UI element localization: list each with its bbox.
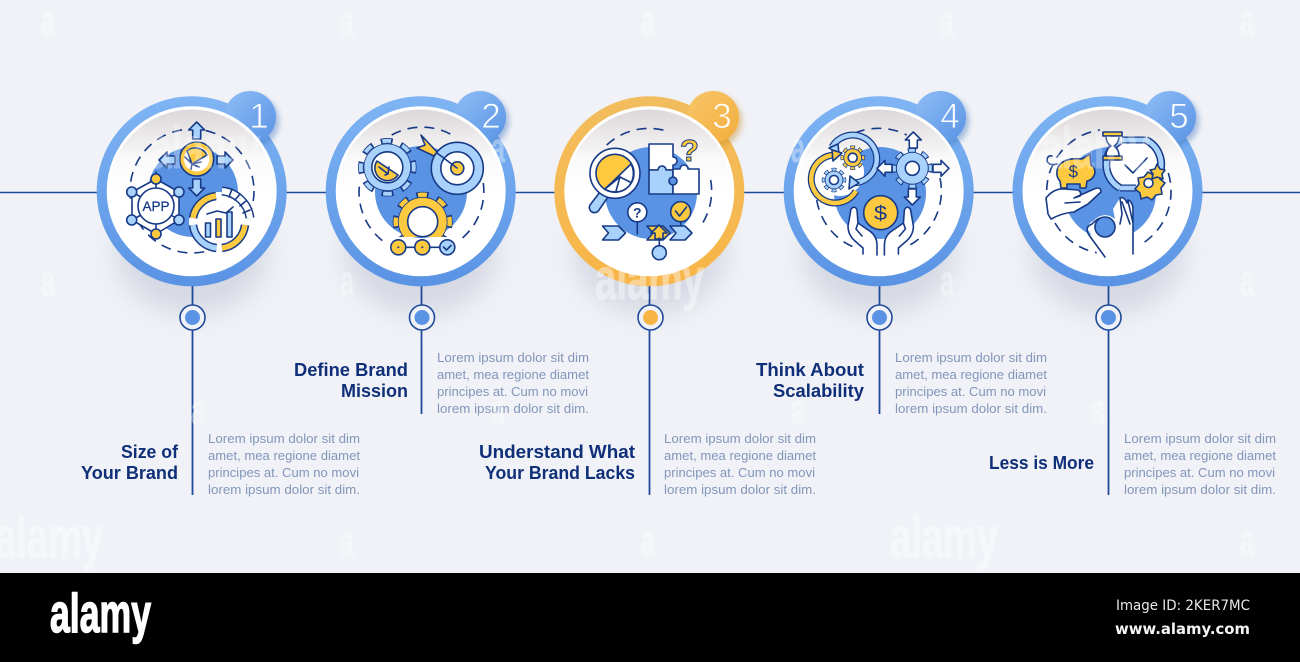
watermarks: alamy	[595, 247, 704, 312]
watermarks: alamy	[1040, 116, 1150, 181]
text block 3: principes at. Cum no movi	[664, 465, 815, 480]
heading 5: Less is More	[989, 453, 1094, 473]
watermarks: a	[1091, 386, 1105, 433]
text block 3: lorem ipsum dolor sit dim.	[664, 482, 816, 497]
text block 3: amet, mea regione diamet	[664, 448, 816, 463]
node 1	[180, 305, 205, 330]
icon: app and analytics: APP	[142, 198, 170, 214]
text block 5	[1124, 431, 1276, 497]
heading 1: Your Brand	[81, 463, 178, 483]
watermarks: a	[41, 257, 55, 304]
text block 4: Lorem ipsum dolor sit dim	[895, 350, 1047, 365]
text block 2: Lorem ipsum dolor sit dim	[437, 350, 589, 365]
heading 2: Define Brand	[294, 360, 408, 380]
node 4	[867, 305, 892, 330]
watermarks: a	[1240, 257, 1254, 304]
badge 4: 4	[940, 97, 960, 136]
heading 4	[756, 360, 864, 401]
panel: step 1 Size of Your Brand	[81, 91, 360, 497]
heading 4: Scalability	[773, 381, 864, 401]
icon: scaling gears and money: $	[874, 203, 887, 225]
node 2	[410, 305, 434, 330]
text block 5: lorem ipsum dolor sit dim.	[1124, 482, 1276, 497]
badge 5	[1144, 91, 1199, 147]
watermarks: a	[340, 517, 354, 564]
icon: magnifier and puzzle	[589, 128, 712, 260]
watermarks: a	[491, 386, 505, 433]
badge 3: 3	[712, 97, 732, 136]
node 5	[1096, 305, 1121, 330]
footer bar	[0, 573, 1300, 662]
text block 5: amet, mea regione diamet	[1124, 448, 1276, 463]
icon: app and analytics	[127, 122, 254, 253]
badge 2	[454, 91, 509, 147]
ring 5	[1012, 96, 1202, 286]
badge 4	[914, 91, 969, 147]
node 3	[638, 305, 663, 330]
watermarks: a	[641, 517, 655, 564]
text block 5: principes at. Cum no movi	[1124, 465, 1275, 480]
text block 4: amet, mea regione diamet	[895, 367, 1047, 382]
watermarks: a	[191, 386, 205, 433]
text block 1	[208, 431, 360, 497]
watermarks: a	[791, 124, 805, 171]
text block 1: lorem ipsum dolor sit dim.	[208, 482, 360, 497]
text block 3: Lorem ipsum dolor sit dim	[664, 431, 816, 446]
image id: Image ID: 2KER7MC	[1116, 598, 1250, 614]
text block 2: lorem ipsum dolor sit dim.	[437, 401, 589, 416]
text block 4	[895, 350, 1047, 416]
inner disc 3	[564, 106, 734, 276]
text block 1: principes at. Cum no movi	[208, 465, 359, 480]
text block 4: principes at. Cum no movi	[895, 384, 1046, 399]
badge 2: 2	[481, 97, 501, 136]
text block 1: amet, mea regione diamet	[208, 448, 360, 463]
heading 3	[479, 442, 635, 483]
text block 2: principes at. Cum no movi	[437, 384, 588, 399]
watermarks: a	[940, 257, 954, 304]
badge 5: 5	[1169, 97, 1189, 136]
heading 2: Mission	[341, 381, 408, 401]
watermarks: alamy	[150, 116, 260, 181]
icon: savings, time and approval: $	[1068, 162, 1078, 181]
text block 3	[664, 431, 816, 497]
panel: step 5 Less is More	[989, 91, 1276, 497]
badge 3	[687, 91, 742, 147]
badge 1	[224, 91, 279, 147]
heading 2	[294, 360, 408, 401]
text block 1: Lorem ipsum dolor sit dim	[208, 431, 360, 446]
icon: magnifier and puzzle: ?	[680, 133, 699, 168]
inner disc 5	[1022, 106, 1192, 276]
icon: magnifier and puzzle: ?	[633, 204, 642, 220]
heading 1	[81, 442, 179, 483]
ring 2	[326, 96, 516, 286]
ring 4	[784, 96, 974, 286]
icon: savings, time and approval	[1046, 130, 1171, 257]
horizontal timeline line	[0, 192, 1300, 194]
inner disc 1	[107, 106, 277, 276]
heading 3: Understand What	[479, 442, 635, 462]
watermarks: a	[791, 386, 805, 433]
panel: step 4 Think About Scalability	[756, 91, 1047, 416]
text block 4: lorem ipsum dolor sit dim.	[895, 401, 1047, 416]
inner disc 2	[336, 106, 506, 276]
text block 2: amet, mea regione diamet	[437, 367, 589, 382]
icon: gears and target	[359, 127, 484, 255]
watermarks: alamy	[890, 506, 998, 571]
text block 5: Lorem ipsum dolor sit dim	[1124, 431, 1276, 446]
website: www.alamy.com	[1115, 620, 1250, 638]
inner disc 4	[794, 106, 964, 276]
heading 1: Size of	[121, 442, 179, 462]
ring 1	[97, 96, 287, 286]
icon: scaling gears and money	[811, 128, 949, 255]
badge 1: 1	[249, 97, 269, 136]
text block 2	[437, 350, 589, 416]
heading 3: Your Brand Lacks	[485, 463, 635, 483]
logo: alamy: alamy	[50, 582, 151, 644]
watermarks: a	[491, 124, 505, 171]
ring 3	[554, 96, 744, 286]
watermarks: a	[1240, 517, 1254, 564]
panel: step 3 Understand What Your Brand Lacks	[479, 91, 816, 497]
watermarks: a	[340, 257, 354, 304]
heading 4: Think About	[756, 360, 864, 380]
panel: step 2 Define Brand Mission	[294, 91, 589, 416]
